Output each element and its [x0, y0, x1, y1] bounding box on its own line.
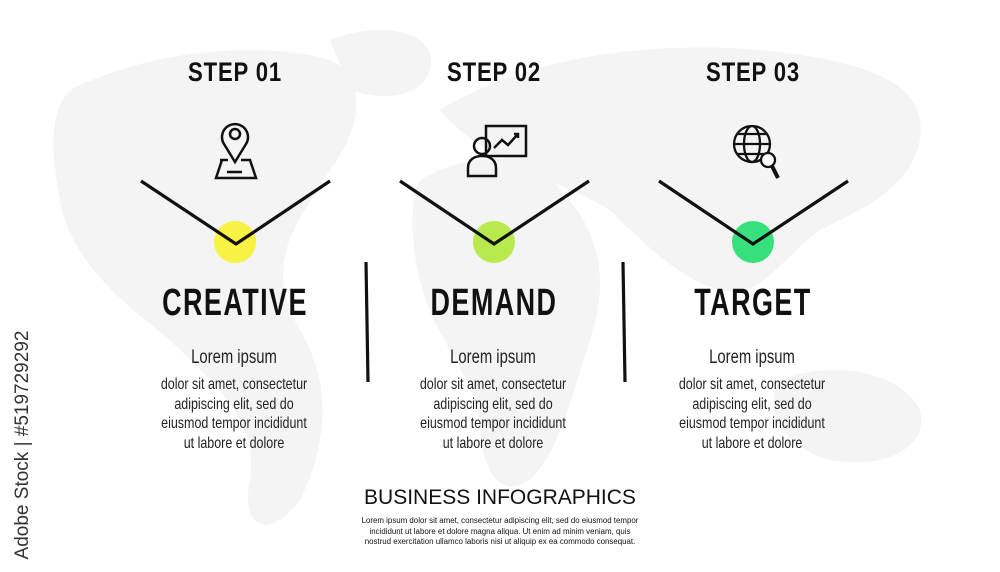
text block 2: Lorem ipsum: [450, 347, 536, 368]
text block 3: eiusmod tempor incididunt: [679, 415, 825, 432]
chevron 3: [659, 181, 848, 244]
footer text: Lorem ipsum dolor sit amet, consectetur adipiscing elit, sed do eiusmod tempor: [362, 516, 638, 525]
icon: presenter with chart: [466, 124, 528, 178]
text block 2: [420, 347, 566, 452]
icon: globe with magnifier: [732, 124, 780, 179]
footer text: [362, 516, 638, 546]
text block 2: dolor sit amet, consectetur: [420, 376, 566, 393]
divider 2: [623, 262, 625, 382]
text block 2: ut labore et dolore: [443, 435, 543, 452]
watermark: vertical stock text: Adobe Stock | #519729292: [12, 331, 33, 559]
text: STEP 02: [447, 57, 541, 87]
text block 1: eiusmod tempor incididunt: [161, 415, 307, 432]
divider 1: [366, 262, 368, 382]
text block 3: Lorem ipsum: [709, 347, 795, 368]
heading: CREATIVE: CREATIVE: [162, 282, 308, 324]
step titles: STEP 01: [188, 57, 282, 87]
text block 2: eiusmod tempor incididunt: [420, 415, 566, 432]
text block 1: Lorem ipsum: [191, 347, 277, 368]
footer text: incididunt ut labore et dolore magna aliqua. Ut enim ad minim veniam, quis: [370, 526, 630, 536]
footer title: BUSINESS INFOGRAPHICS: [364, 486, 636, 509]
text block 3: adipiscing elit, sed do: [692, 396, 812, 413]
heading: DEMAND: DEMAND: [431, 282, 557, 324]
text block 1: [161, 347, 307, 452]
text block 3: [679, 347, 825, 452]
dot: green: [732, 221, 774, 263]
text block 3: dolor sit amet, consectetur: [679, 376, 825, 393]
chevron 1: [141, 181, 330, 244]
dot: yellow: [214, 221, 256, 263]
footer text: nostrud exercitation ullamco laboris nisi ut aliquip ex ea commodo consequat.: [365, 537, 635, 546]
chevron 2: [400, 181, 589, 244]
text block 1: ut labore et dolore: [184, 435, 284, 452]
text block 3: ut labore et dolore: [702, 435, 802, 452]
heading: TARGET: TARGET: [694, 282, 812, 324]
dot: lime: [473, 221, 515, 263]
text block 2: adipiscing elit, sed do: [433, 396, 553, 413]
icon: map pin: [214, 122, 258, 180]
text block 1: adipiscing elit, sed do: [174, 396, 294, 413]
text block 1: dolor sit amet, consectetur: [161, 376, 307, 393]
text: STEP 03: [706, 57, 800, 87]
